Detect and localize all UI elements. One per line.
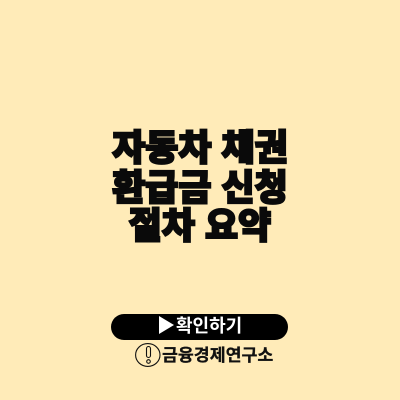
title: [111, 127, 288, 246]
brand: 금융경제연구소: [135, 343, 273, 367]
brand name: 금융경제연구소: [162, 345, 273, 365]
icon: play triangle: [159, 316, 174, 334]
title: 절차 요약: [129, 205, 271, 246]
title: 자동차 채권: [112, 127, 288, 168]
title: 환급금 신청: [112, 167, 288, 208]
icon: exclamation circle: [135, 343, 161, 367]
button: confirm: [111, 314, 288, 340]
button label: 확인하기: [176, 316, 242, 336]
